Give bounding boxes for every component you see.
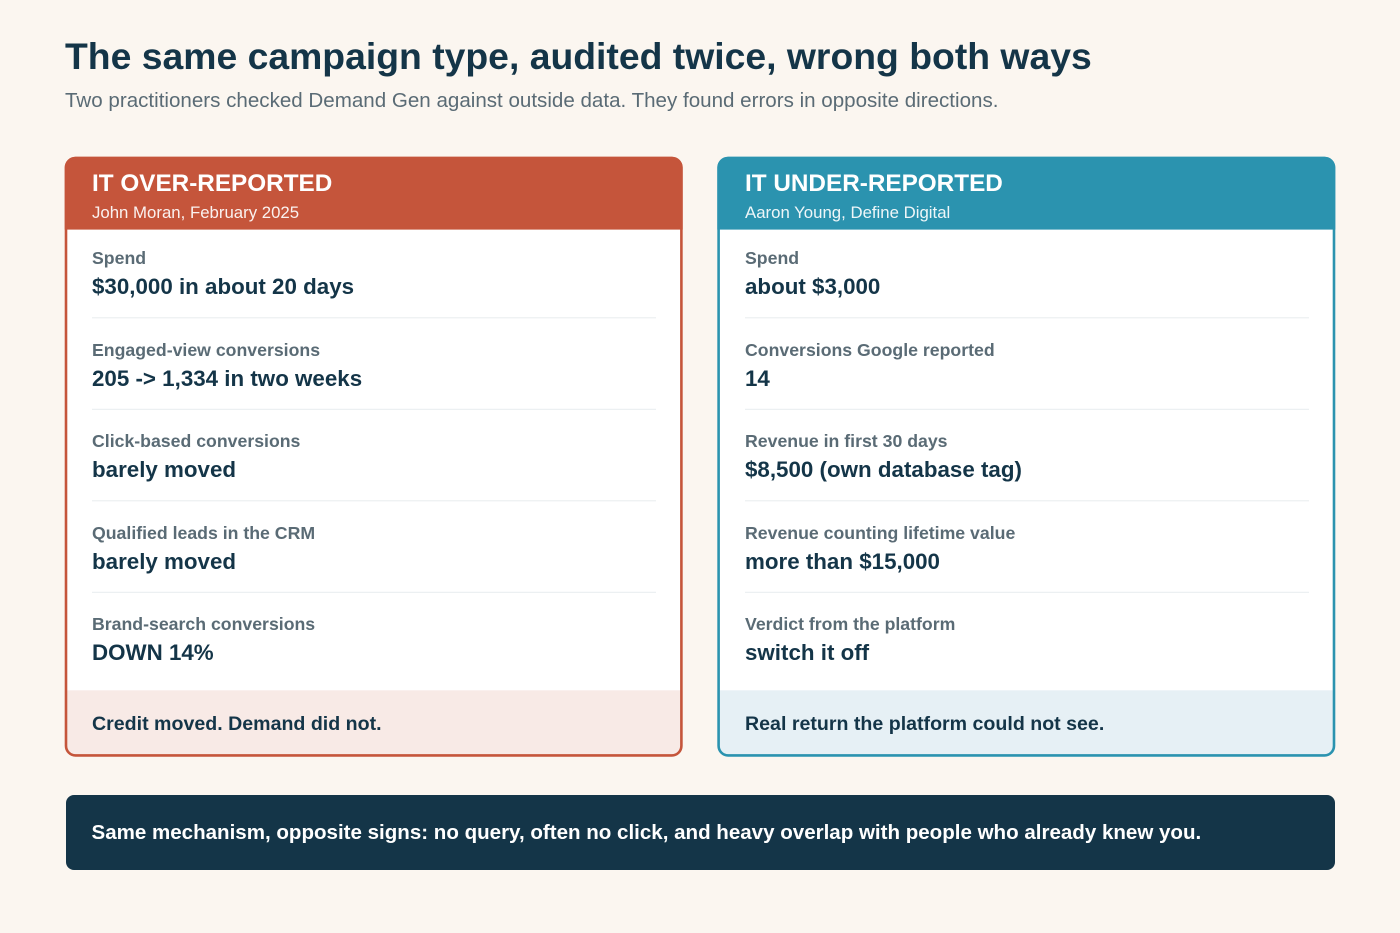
row: qualified leads <box>92 523 315 574</box>
row: revenue in first 30 days: Revenue in first 30 days <box>745 431 948 451</box>
row: click-based conversions: barely moved <box>92 457 236 482</box>
row: revenue in first 30 days: $8,500 (own database tag) <box>745 457 1022 482</box>
row: lifetime value revenue: more than $15,000 <box>745 549 940 574</box>
row: spend: $30,000 in about 20 days <box>92 274 354 299</box>
row: click-based conversions: Click-based conversions <box>92 431 300 451</box>
row: platform verdict: switch it off <box>745 640 869 665</box>
row: spend <box>92 248 354 299</box>
row: lifetime value revenue <box>745 523 1015 574</box>
row: conversions Google reported: Conversions Google reported <box>745 340 995 360</box>
row: spend: Spend <box>92 248 146 268</box>
panel header: over-reported <box>92 170 332 222</box>
row: click-based conversions <box>92 431 300 482</box>
panel header: under-reported <box>745 170 1003 222</box>
banner text: Same mechanism, opposite signs: no query, often no click, and heavy overlap with people who already knew you. <box>92 821 1201 844</box>
row: spend: about $3,000 <box>745 274 880 299</box>
panel: over-reported <box>64 156 683 757</box>
panel header: under-reported: IT UNDER-REPORTED <box>745 170 1003 197</box>
row: qualified leads: barely moved <box>92 549 236 574</box>
row: conversions Google reported: 14 <box>745 366 770 391</box>
title: The same campaign type, audited twice, wrong both ways <box>65 35 1092 77</box>
panel header: under-reported: Aaron Young, Define Digital <box>745 203 950 222</box>
panel: under-reported <box>717 156 1336 757</box>
row: brand-search conversions <box>92 614 315 665</box>
takeaway banner <box>66 795 1334 870</box>
row: engaged-view conversions: Engaged-view conversions <box>92 340 320 360</box>
row: platform verdict <box>745 614 955 665</box>
row: engaged-view conversions <box>92 340 362 391</box>
subtitle: Two practitioners checked Demand Gen against outside data. They found errors in opposite directions. <box>65 89 998 112</box>
row: brand-search conversions: DOWN 14% <box>92 640 214 665</box>
row: engaged-view conversions: 205 -> 1,334 in two weeks <box>92 366 362 391</box>
panel header: over-reported: John Moran, February 2025 <box>92 203 299 222</box>
row: lifetime value revenue: Revenue counting lifetime value <box>745 523 1015 543</box>
panel footer: over-reported: Credit moved. Demand did not. <box>92 713 382 735</box>
row: platform verdict: Verdict from the platform <box>745 614 955 634</box>
row: spend <box>745 248 880 299</box>
row: spend: Spend <box>745 248 799 268</box>
row: revenue in first 30 days <box>745 431 1022 482</box>
row: conversions Google reported <box>745 340 995 391</box>
panel footer: under-reported: Real return the platform could not see. <box>745 713 1104 735</box>
row: brand-search conversions: Brand-search conversions <box>92 614 315 634</box>
panel header: over-reported: IT OVER-REPORTED <box>92 170 332 197</box>
row: qualified leads: Qualified leads in the CRM <box>92 523 315 543</box>
